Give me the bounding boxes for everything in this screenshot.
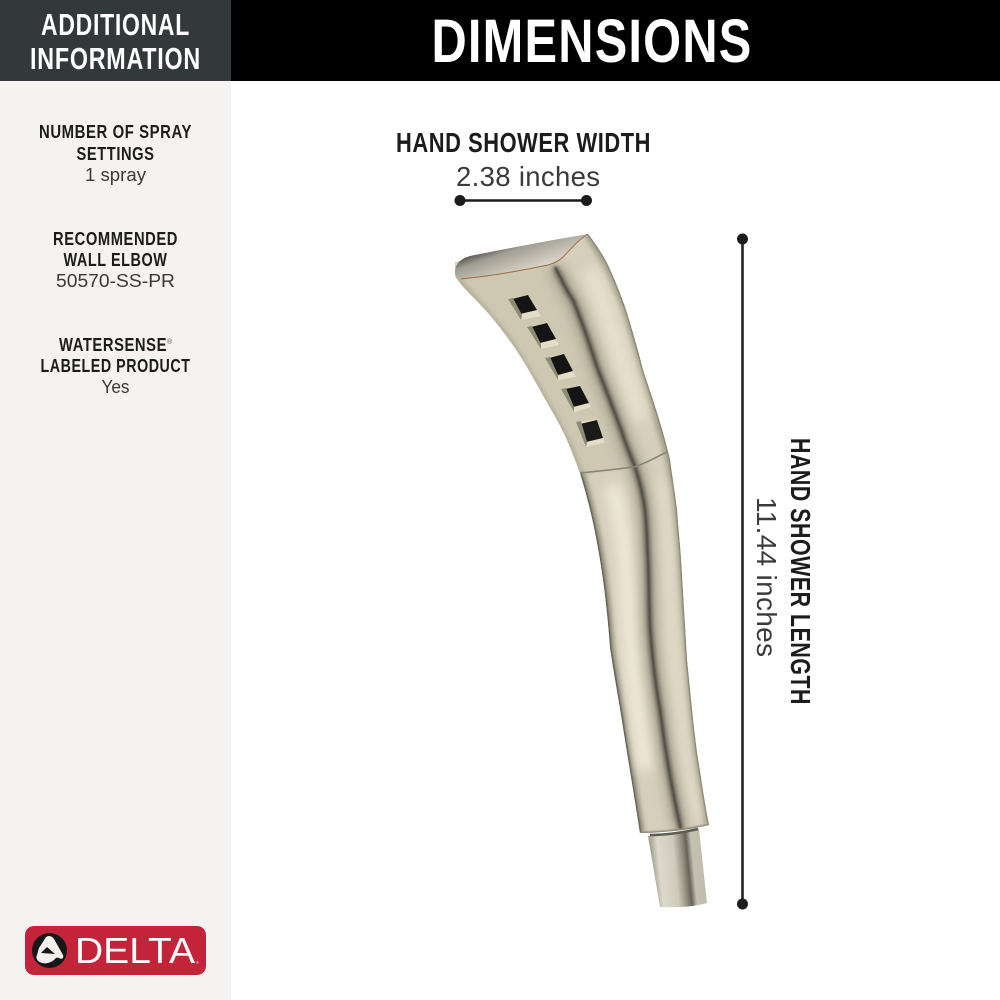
handle highlights [612,485,646,770]
info block: number of spray settings: SETTINGS [76,144,154,164]
dimension: hand shower length [737,234,816,910]
ridge wide shade [555,267,681,830]
info block: watersense labeled product [40,335,190,397]
hand shower top face [455,234,588,279]
info block: recommended wall elbow: 50570-SS-PR [56,270,175,291]
head left face [455,266,620,474]
ridge core line [555,267,681,830]
nozzle collar [650,829,698,835]
ridge shadow [555,267,681,830]
right edge soft shade [588,234,709,825]
info block: watersense labeled product: WATERSENSE [59,335,167,355]
logo: Delta: DELTA [75,930,196,971]
info block: recommended wall elbow: RECOMMENDED [53,229,178,249]
info block: number of spray settings [39,122,192,185]
title bar: dimensions: DIMENSIONS [432,7,752,75]
info block: number of spray settings: 1 spray [85,164,147,185]
sidebar heading: additional information [0,0,231,81]
hand shower body [455,234,709,833]
hand shower nozzle [648,829,707,907]
title bar: dimensions [231,0,1000,81]
sharp outer edge left [580,473,640,833]
sidebar heading: additional information: ADDITIONAL [41,8,190,42]
product image: hand shower [455,234,709,908]
sidebar heading: additional information: INFORMATION [30,42,201,76]
dimension: hand shower width [396,127,651,206]
info block: number of spray settings: NUMBER OF SPRAY [39,122,192,142]
seam [580,451,669,473]
info block: recommended wall elbow [53,229,178,291]
dimension: hand shower width: HAND SHOWER WIDTH [396,127,651,158]
info block: watersense labeled product: LABELED PRODUCT [40,356,190,376]
info block: watersense labeled product: ® [167,338,173,346]
bottom shade [640,825,709,833]
head left edge soft shade [455,276,580,473]
left edge soft shade [580,473,640,833]
spray nozzles [508,295,605,447]
sharp outer edge right [588,234,709,825]
dimension: hand shower length: 11.44 inches [751,497,782,657]
logo: Delta: ® [196,960,199,965]
info block: watersense labeled product: Yes [102,376,130,397]
panel: additional information sidebar [0,0,231,1000]
dimension: hand shower length: HAND SHOWER LENGTH [785,438,816,705]
dimension: hand shower width: 2.38 inches [456,161,600,192]
info block: recommended wall elbow: WALL ELBOW [64,250,168,270]
logo: Delta [25,926,206,975]
